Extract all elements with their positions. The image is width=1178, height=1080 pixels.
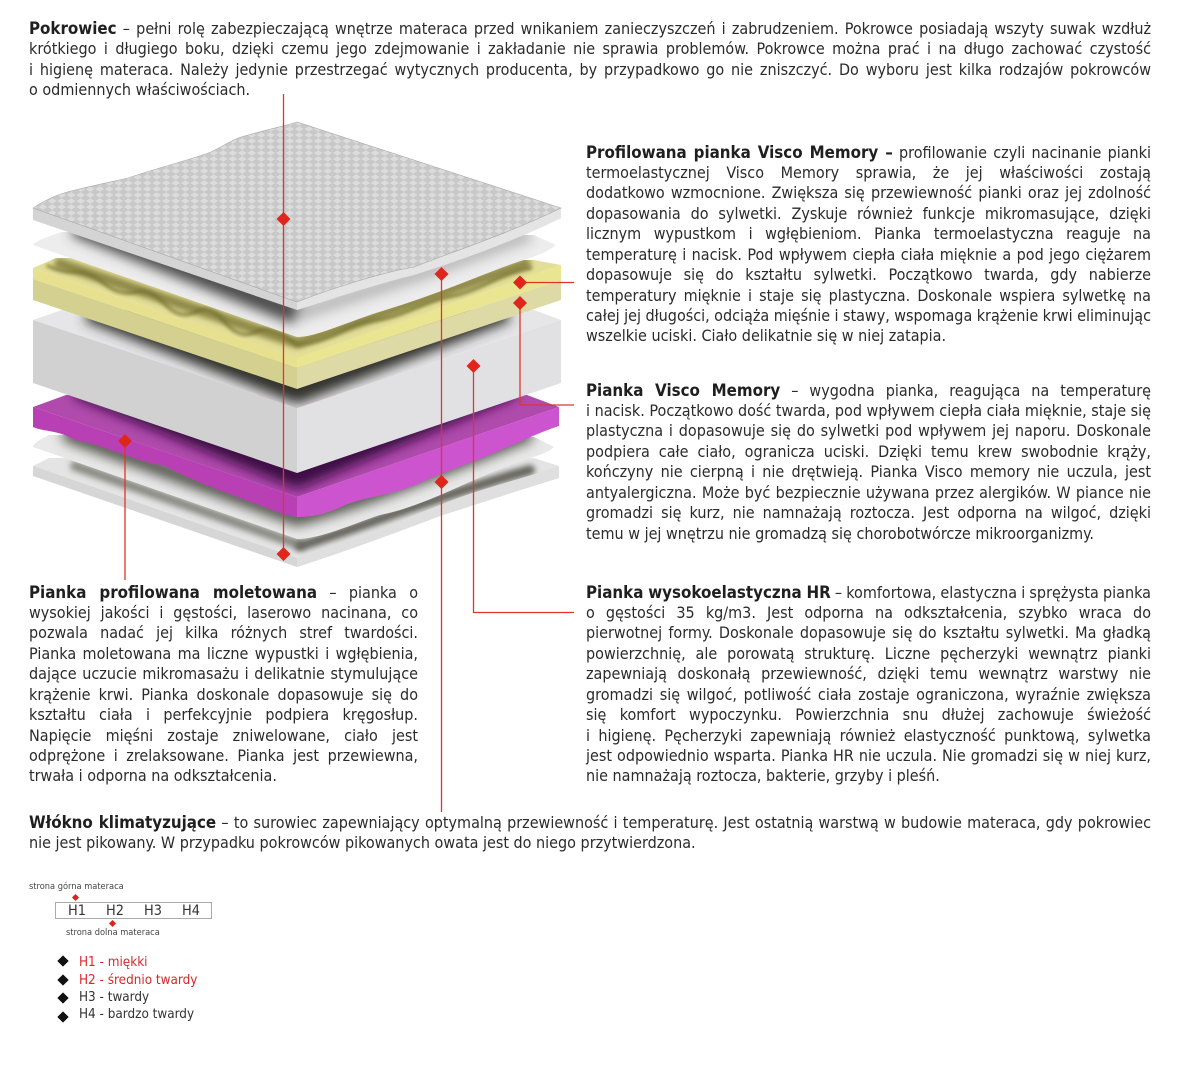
text block: Pianka wysokoelastyczna HR: zapewniają doskonałą przewiewność, dzięki temu wewnątrz warstwy nie bbox=[586, 664, 1151, 683]
text block: Pianka Visco Memory: kończyny nie cierpną i nie drętwieją. Pianka Visco memory nie uczula, jest bbox=[586, 462, 1151, 481]
text block: Włókno klimatyzujące: Włókno klimatyzujące – to surowiec zapewniający optymalną przewiewność i temperaturę. Jest ostatnią warstwą w budowie materaca, gdy pokrowiec bbox=[29, 812, 1151, 832]
hardness legend bbox=[57, 955, 197, 1022]
text block: Profilowana pianka Visco Memory: dodatkowo wzmocnione. Zwiększa się przewiewność pianki oraz jej zdolność bbox=[586, 183, 1151, 202]
leader: HR foam bbox=[466, 359, 574, 612]
text block: Pianka Visco Memory: Pianka Visco Memory – wygodna pianka, reagująca na temperaturę bbox=[586, 380, 1151, 400]
text block: Profilowana pianka Visco Memory: wszelkie uciski. Ciało delikatnie się w niej zatapia. bbox=[586, 326, 946, 345]
text block: Pianka profilowana moletowana: krążenie krwi. Pianka doskonale dopasowuje się do bbox=[29, 685, 418, 704]
text block: Pianka wysokoelastyczna HR: i higienę. Pęcherzyki zapewniają również elastyczność punktową, sylwetka bbox=[586, 726, 1151, 745]
legend item: H2: H2 - średnio twardy bbox=[79, 973, 197, 988]
marker: bottom side H2 bbox=[109, 919, 116, 927]
text block: Pianka profilowana moletowana bbox=[29, 582, 418, 785]
scale box H1 to H4: H3 bbox=[144, 903, 162, 919]
label: top side of mattress: strona górna materaca bbox=[29, 881, 124, 892]
text block: Pianka profilowana moletowana: pozwala nadać jej kilka różnych stref twardości. bbox=[29, 623, 418, 642]
text block: Pianka wysokoelastyczna HR: Pianka wysokoelastyczna HR – komfortowa, elastyczna i sprężysta pianka bbox=[586, 582, 1151, 602]
text block: Pokrowiec: Pokrowiec – pełni rolę zabezpieczającą wnętrze materaca przed wnikaniem zanieczyszczeń i zabrudzeniem. Pokrowce posiadają wszyty suwak wzdłuż bbox=[29, 18, 1151, 38]
text block: Włókno klimatyzujące bbox=[29, 812, 1151, 852]
text block: Pianka Visco Memory: i nacisk. Początkowo dość twarda, pod wpływem ciepła ciała mięknie, staje się bbox=[586, 401, 1151, 420]
text block: Pianka wysokoelastyczna HR: jest odpowiednio wsparta. Pianka HR nie uczula. Nie gromadzi się w niej kurz, bbox=[586, 746, 1151, 765]
layer: yellow visco foam bbox=[33, 258, 561, 389]
text block: Pianka Visco Memory bbox=[586, 380, 1151, 543]
text block: Pianka wysokoelastyczna HR: się komfort wypoczynku. Powierzchnia snu dłużej zachowuje świeżość bbox=[586, 705, 1151, 724]
layer: grey high-elastic foam bbox=[33, 307, 561, 473]
text block: Pianka wysokoelastyczna HR bbox=[586, 582, 1151, 785]
text block: Pianka profilowana moletowana: Pianka moletowana ma liczne wypustki i wgłębienia, bbox=[29, 644, 418, 663]
text block: Pianka wysokoelastyczna HR: powierzchnię, ale porowatą strukturę. Liczne pęcherzyki wewnątrz pianki bbox=[586, 644, 1151, 663]
text block: Pokrowiec: o odmiennych właściwościach. bbox=[29, 80, 250, 99]
legend item: H3: H3 - twardy bbox=[79, 990, 149, 1005]
text block: Pianka Visco Memory: antyalergiczna. Może być bezpiecznie używana przez alergików. W piance nie bbox=[586, 483, 1151, 502]
text block: Pianka profilowana moletowana: kształtu ciała i perfekcyjnie podpiera kręgosłup. bbox=[29, 705, 418, 724]
text block: Profilowana pianka Visco Memory: licznym wypustkom i wgłębieniom. Pianka termoelastyczna reaguje na bbox=[586, 224, 1151, 243]
text block: Pianka wysokoelastyczna HR: gromadzi się wilgoć, potliwość ciała zostaje ograniczona, wyraźnie zwiększa bbox=[586, 685, 1151, 704]
scale box H1 to H4 bbox=[55, 902, 212, 919]
text block: Profilowana pianka Visco Memory: dopasowania do sylwetki. Zyskuje również funkcje mikromasujące, dzięki bbox=[586, 204, 1151, 223]
leader: climate fibre bbox=[434, 267, 448, 812]
text block: Profilowana pianka Visco Memory: całej jej długości, odciąża mięśnie i stawy, wspomaga krążenie krwi eliminując bbox=[586, 306, 1151, 325]
label: bottom side of mattress: strona dolna materaca bbox=[66, 927, 160, 938]
text block: Pianka Visco Memory: plastyczna i dopasowuje się do sylwetki pod wpływem jej naporu. Doskonale bbox=[586, 421, 1151, 440]
text block: Pianka wysokoelastyczna HR: pierwotnej formy. Doskonale dopasowuje się do kształtu sylwetki. Ma gładką bbox=[586, 623, 1151, 642]
leader: profiled knurled foam bbox=[118, 434, 132, 580]
legend item: H1: H1 - miękki bbox=[79, 955, 148, 970]
text block: Pianka profilowana moletowana: trwała i odporna na odkształcenia. bbox=[29, 766, 277, 785]
text block: Pokrowiec: i higienę materaca. Należy jedynie przestrzegać wytycznych producenta, by przypadkowo go nie zniszczyć. Do wyboru jest kilka rodzajów pokrowców bbox=[29, 60, 1151, 79]
text block: Pianka profilowana moletowana: wysokiej jakości i gęstości, laserowo nacinana, co bbox=[29, 603, 418, 622]
text block: Profilowana pianka Visco Memory bbox=[586, 142, 1151, 345]
scale box H1 to H4: H1 bbox=[68, 903, 86, 919]
text block: Włókno klimatyzujące: nie jest pikowany. W przypadku pokrowców pikowanych owata jest do niego przytwierdzona. bbox=[29, 833, 696, 852]
text block: Pokrowiec bbox=[29, 18, 1151, 99]
text block: Pokrowiec: krótkiego i długiego boku, dzięki czemu jego zdejmowanie i zakładanie nie sprawia problemów. Pokrowce można prać i na długo zachować czystość bbox=[29, 39, 1151, 58]
text block: Pianka profilowana moletowana: dające uczucie mikromasażu i delikatnie stymulujące bbox=[29, 664, 418, 683]
hardness scale diagram bbox=[29, 881, 212, 938]
text block: Pianka wysokoelastyczna HR: o gęstości 35 kg/m3. Jest odporna na odkształcenia, szybko wraca do bbox=[586, 603, 1151, 622]
marker: top side H1 bbox=[72, 893, 79, 901]
scale box H1 to H4: H4 bbox=[182, 903, 200, 919]
layer: upper white sheet bbox=[33, 225, 556, 337]
text block: Profilowana pianka Visco Memory: Profilowana pianka Visco Memory – profilowanie czyli nacinanie pianki bbox=[586, 142, 1151, 162]
text block: Pianka profilowana moletowana: Pianka profilowana moletowana – pianka o bbox=[29, 582, 418, 602]
text block: Profilowana pianka Visco Memory: dopasowuje się do kształtu sylwetki. Początkowo twarda, gdy nabierze bbox=[586, 265, 1151, 284]
leader: profiled Visco Memory foam bbox=[513, 276, 574, 290]
text block: Profilowana pianka Visco Memory: temperaturę i nacisk. Pod wpływem ciepła ciała mięknie a pod jego ciężarem bbox=[586, 245, 1151, 264]
text block: Pianka wysokoelastyczna HR: nie namnażają roztocza, bakterie, grzyby i pleśń. bbox=[586, 766, 940, 785]
layer: quilted cover bbox=[33, 122, 561, 310]
layer: lower white sheet bbox=[33, 435, 554, 539]
layer: purple profiled foam bbox=[33, 395, 559, 517]
text block: Pianka profilowana moletowana: odprężone i zrelaksowane. Pianka jest przewiewna, bbox=[29, 746, 418, 765]
mattress illustration bbox=[32, 122, 562, 567]
text block: Profilowana pianka Visco Memory: temperatury mięknie i staje się plastyczna. Doskonale wspiera sylwetkę na bbox=[586, 286, 1151, 305]
scale box H1 to H4: H2 bbox=[106, 903, 124, 919]
text block: Pianka profilowana moletowana: Napięcie mięśni zostaje zniwelowane, ciało jest bbox=[29, 726, 418, 745]
text block: Pianka Visco Memory: gromadzi się kurz, nie namnażają roztocza. Jest odporna na wilgoć, dzięki bbox=[586, 503, 1151, 522]
leader: Visco Memory foam bbox=[513, 296, 574, 405]
text block: Profilowana pianka Visco Memory: termoelastycznej Visco Memory sprawia, że jej właściwości zostają bbox=[586, 163, 1151, 182]
text block: Pianka Visco Memory: podpiera całe ciało, ogranicza uciski. Dzięki temu krew swobodnie krąży, bbox=[586, 442, 1151, 461]
text block: Pianka Visco Memory: temu w jej wnętrzu nie gromadzą się chorobotwórcze mikroorganizmy. bbox=[586, 524, 1094, 543]
legend item: H4: H4 - bardzo twardy bbox=[79, 1007, 194, 1022]
layer: bottom quilting fibre bbox=[33, 458, 559, 567]
leader: cover bbox=[276, 94, 290, 561]
